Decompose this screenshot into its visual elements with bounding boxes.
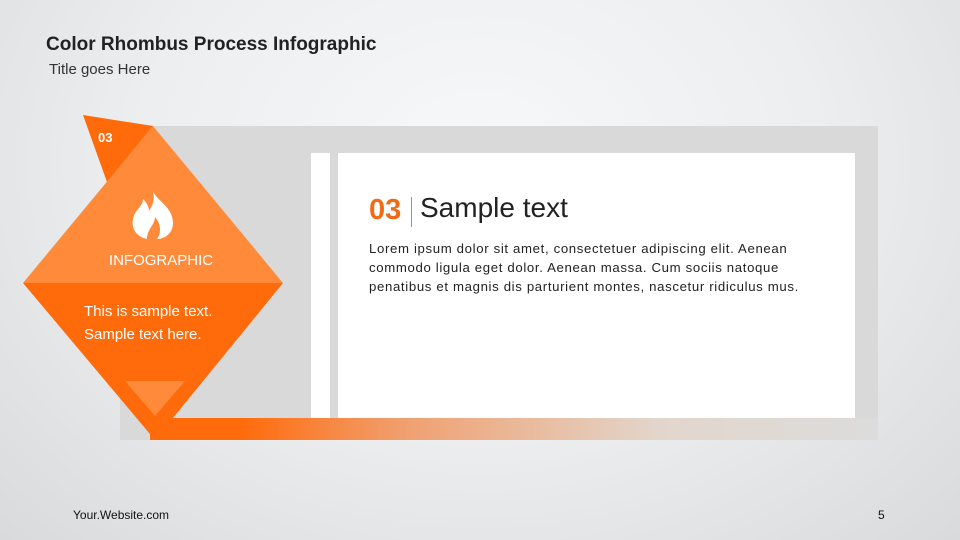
body text: Lorem ipsum dolor sit amet, consectetuer adipiscing elit. Aenean [369,241,787,256]
flag tab [83,115,153,182]
body text: penatibus et magnis dis parturient montes, nascetur ridiculus mus. [369,279,799,294]
rhombus text: Sample text here. [84,326,202,343]
white strip [311,153,330,418]
subtitle: Title goes Here [49,61,150,78]
title: Color Rhombus Process Infographic [46,34,376,55]
page number: 5 [878,508,885,522]
heading: Sample text [420,192,568,223]
rhombus text [84,303,212,343]
flag tab: 03 [98,130,112,145]
icon: flame [133,191,173,239]
rhombus lower [23,283,283,440]
panel: grey background [120,126,878,440]
body text: commodo ligula eget dolor. Aenean massa. Cum sociis natoque [369,260,779,275]
panel: white content box [338,153,855,418]
rhombus text: This is sample text. [84,303,212,320]
footer website: Your.Website.com [73,508,169,522]
heading divider [411,197,412,227]
rhombus upper [23,126,283,283]
small triangle [125,381,185,416]
bottom gradient bar [150,418,878,440]
heading number: 03 [369,194,401,226]
body text [369,241,799,294]
label INFOGRAPHIC: INFOGRAPHIC [109,252,213,269]
